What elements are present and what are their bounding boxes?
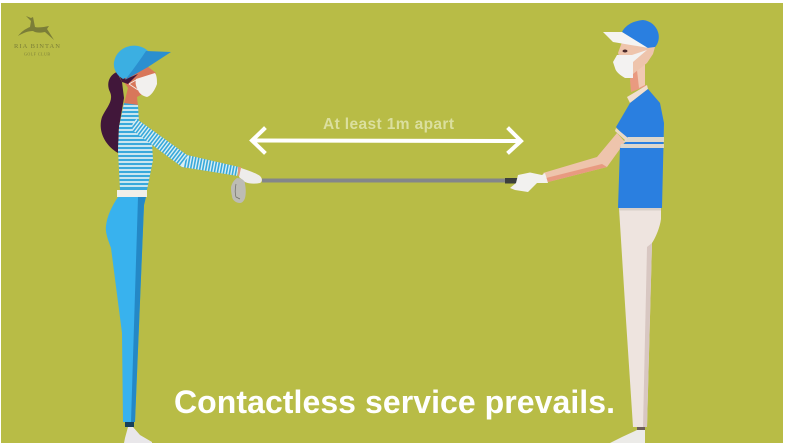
striped sleeve: [134, 122, 238, 171]
shaft: [262, 178, 507, 182]
neck and face: [124, 67, 156, 105]
ankle: [125, 422, 134, 427]
face mask: [613, 50, 647, 78]
collar: [627, 85, 648, 103]
left arrowhead: [252, 129, 264, 152]
club head: [231, 178, 246, 203]
ponytail: [101, 72, 124, 153]
distance label: At least 1m apart: [323, 116, 454, 133]
right arrowhead: [509, 129, 521, 152]
logo: Ria Bintan Golf Club: [14, 16, 60, 56]
golf club: [231, 178, 518, 203]
man golfer: [510, 20, 664, 443]
neck highlight: [637, 62, 645, 88]
woman golfer: [101, 46, 262, 443]
cap: [114, 46, 150, 79]
arm shadow: [546, 164, 607, 182]
cap visor: [603, 32, 648, 48]
mask strap: [129, 80, 138, 90]
eye: [622, 50, 628, 52]
hair under visor: [119, 74, 138, 84]
arrow shaft: [252, 138, 521, 143]
trouser shadow: [131, 197, 146, 422]
sleeve cuff: [615, 128, 628, 141]
glove: [239, 168, 262, 184]
shoe: [124, 427, 152, 443]
club face line: [235, 184, 240, 199]
waist shadow: [619, 208, 661, 210]
striped torso: [118, 103, 153, 190]
face mask: [136, 73, 157, 97]
trouser shadow: [643, 243, 652, 427]
cap visor: [125, 51, 171, 80]
trousers: [619, 208, 661, 427]
logo subtitle: GOLF CLUB: [24, 52, 50, 56]
icon: leaping deer: [18, 16, 54, 40]
wrist: [238, 167, 241, 176]
cap dome: [622, 20, 659, 48]
shirt stripes: [620, 137, 664, 148]
ankle: [637, 427, 645, 430]
trousers: [106, 197, 146, 422]
polo shirt: [616, 89, 664, 208]
glove: [510, 172, 548, 192]
face: [618, 42, 655, 74]
shoe: [610, 430, 645, 443]
logo name: RIA BINTAN: [14, 43, 60, 50]
forearm: [543, 133, 625, 182]
distance arrow: [252, 129, 521, 152]
grip: [505, 178, 518, 184]
belt: [117, 190, 147, 197]
caption: Contactless service prevails.: [174, 384, 615, 420]
neck: [630, 62, 647, 92]
